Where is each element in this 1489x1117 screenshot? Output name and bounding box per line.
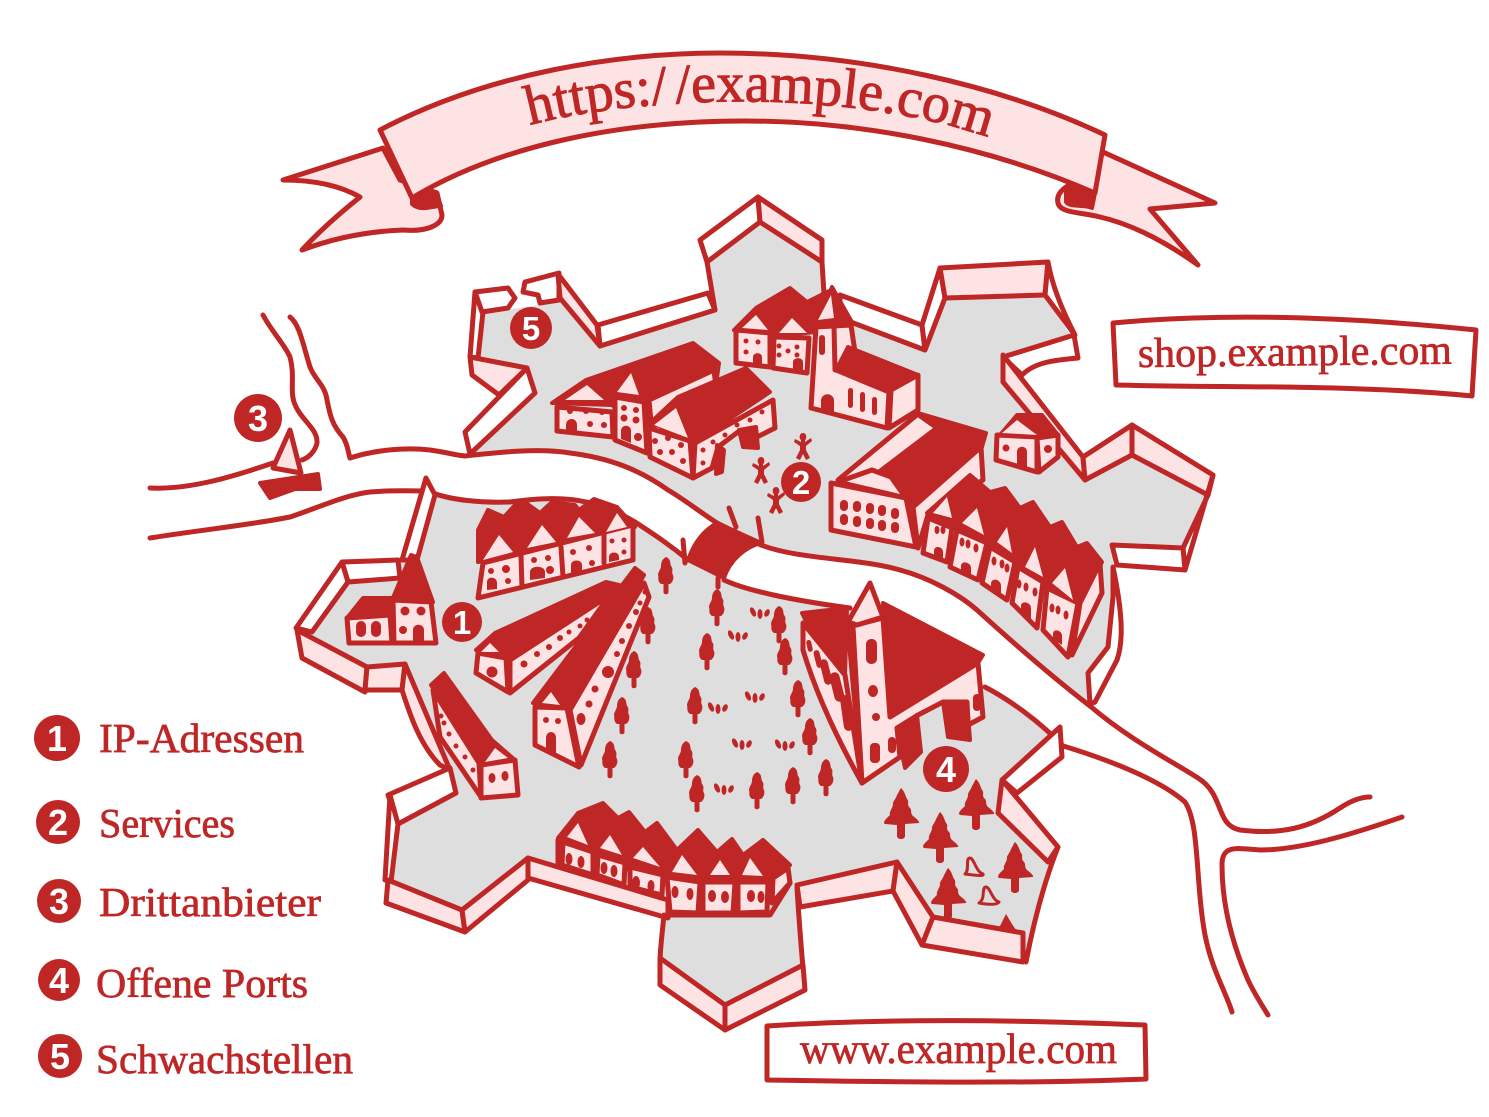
buildings: south row of houses xyxy=(558,803,790,915)
legend item 4: Offene Ports xyxy=(96,960,308,1006)
legend item 3: Drittanbieter xyxy=(99,879,321,925)
city walls north xyxy=(465,197,1213,704)
map marker 2: 2 xyxy=(792,464,810,501)
buildings: north east row of houses xyxy=(923,475,1102,657)
buildings: north east hall xyxy=(831,413,986,548)
buildings: north church group xyxy=(734,287,918,428)
map marker 4 xyxy=(923,746,969,792)
shrubs xyxy=(965,858,999,904)
map marker 1 xyxy=(442,602,482,642)
city walls south xyxy=(296,478,1062,1030)
bridge xyxy=(683,508,762,587)
map marker 5 xyxy=(510,307,552,349)
legend item 2 xyxy=(36,800,235,846)
building: small house east xyxy=(996,415,1058,472)
boat with sail xyxy=(260,430,320,498)
river bank: south east xyxy=(985,687,1062,745)
legend item 2: 2 xyxy=(48,802,68,843)
legend item 1: IP-Adressen xyxy=(99,715,304,761)
building: cathedral xyxy=(802,583,983,783)
river bank: north xyxy=(465,451,1090,706)
legend xyxy=(34,715,353,1082)
map marker 5: 5 xyxy=(522,310,540,347)
buildings: north west group xyxy=(552,343,775,478)
subdomain label: shop: shop.example.com xyxy=(1138,328,1452,377)
ground north of river xyxy=(465,222,1208,706)
legend item 5: 5 xyxy=(50,1036,70,1077)
banner left tail xyxy=(283,148,442,250)
map marker 2 xyxy=(781,462,821,502)
building: long hall one xyxy=(476,582,619,693)
legend item 3: 3 xyxy=(49,881,69,922)
banner right tail xyxy=(1058,152,1215,265)
legend item 1: 1 xyxy=(47,718,67,759)
building: long hall two xyxy=(533,568,649,767)
subdomain label: www xyxy=(767,1021,1146,1082)
legend item 2: Services xyxy=(99,800,235,846)
buildings: row south of river xyxy=(478,499,635,598)
subdomain label: shop xyxy=(1113,317,1476,396)
trees in park xyxy=(602,557,833,812)
banner: url ribbon xyxy=(280,50,1218,268)
trees in forest xyxy=(884,779,1033,930)
people xyxy=(752,433,812,514)
legend item 4: 4 xyxy=(49,960,69,1001)
river bank: south xyxy=(430,492,850,608)
building: south west hall xyxy=(431,673,518,798)
grass tufts xyxy=(707,606,796,795)
map marker 3: 3 xyxy=(248,398,268,439)
map marker 3 xyxy=(234,394,282,442)
ground south of river xyxy=(296,492,1058,1030)
building: west church xyxy=(347,555,436,643)
map marker 4: 4 xyxy=(936,749,956,790)
legend item 5: Schwachstellen xyxy=(96,1036,353,1082)
subdomain label: www: www.example.com xyxy=(800,1027,1117,1073)
banner text: https://example.com xyxy=(520,65,991,138)
river and stream lines xyxy=(150,315,1402,1015)
banner left fold xyxy=(412,192,441,208)
banner right fold xyxy=(1066,187,1095,208)
banner main band xyxy=(380,53,1105,198)
map marker 1: 1 xyxy=(453,604,471,641)
